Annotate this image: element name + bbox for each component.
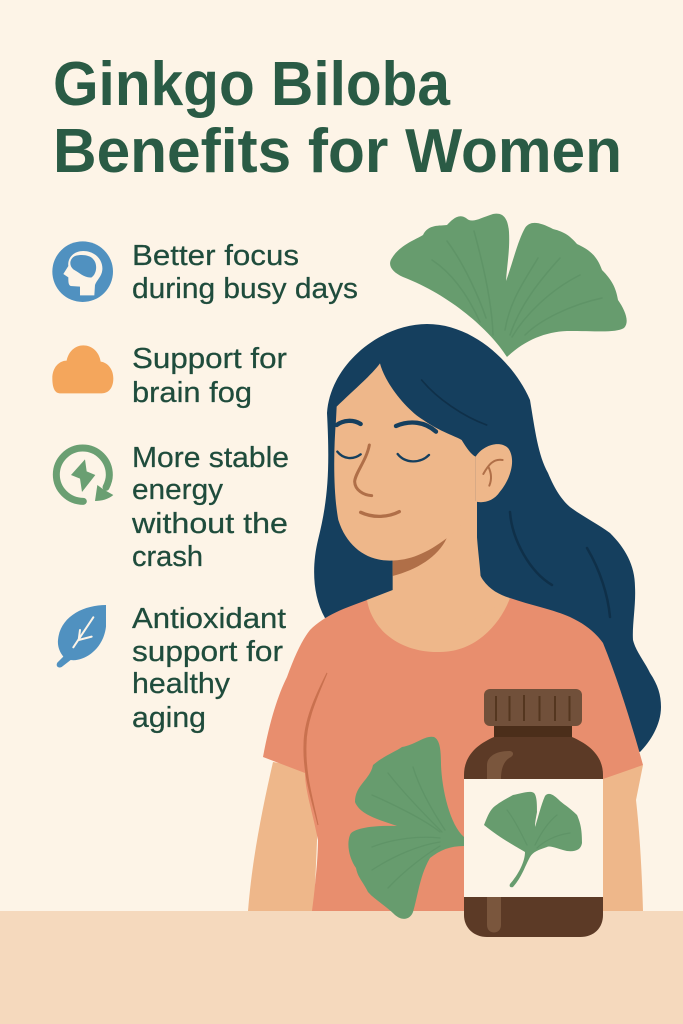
- text: antioxidant: aging: [132, 702, 206, 734]
- chin shadow: [393, 538, 447, 576]
- text: stable energy: [131, 442, 289, 573]
- icon: head with brain: [52, 241, 113, 302]
- highlight: [487, 751, 513, 932]
- supplement bottle: [464, 689, 603, 937]
- ginkgo leaf above head: [390, 214, 627, 357]
- text: antioxidant: healthy: [132, 668, 231, 700]
- text: antioxidant: Antioxidant: [132, 603, 286, 635]
- table: [0, 911, 683, 1024]
- text: brain fog: [132, 343, 287, 409]
- text: brain fog: Support for: [132, 343, 287, 375]
- shirt fold: [304, 673, 327, 825]
- text: better focus: Better focus: [132, 240, 299, 272]
- nose: [355, 445, 372, 496]
- text: stable energy: crash: [132, 541, 203, 573]
- hair strand: [422, 380, 487, 425]
- closed eyes: [337, 452, 429, 461]
- right arm: [600, 765, 643, 911]
- title: [53, 50, 622, 186]
- title: Benefits for Women: [53, 117, 622, 186]
- cap: [484, 689, 582, 726]
- title: Ginkgo Biloba: [53, 50, 450, 119]
- text: antioxidant: [132, 603, 286, 734]
- shirt: [263, 598, 643, 911]
- text: better focus: during busy days: [132, 273, 358, 305]
- mouth: [361, 512, 399, 516]
- text: stable energy: energy: [132, 474, 224, 506]
- text: brain fog: brain fog: [132, 377, 252, 409]
- bottle body: [464, 737, 603, 937]
- text: antioxidant: support for: [132, 636, 283, 668]
- text: better focus: [132, 240, 358, 305]
- label: [464, 779, 603, 897]
- face: [334, 363, 512, 576]
- ginkgo leaf beside bottle: [348, 737, 464, 919]
- icon: blue leaf: [57, 605, 106, 667]
- left arm: [248, 762, 320, 911]
- face shape: [334, 363, 476, 561]
- neck: [367, 500, 517, 653]
- cap ridges: [496, 695, 570, 721]
- label leaf: [484, 792, 582, 887]
- ear: [476, 444, 512, 502]
- eyebrows: [337, 421, 436, 432]
- woman illustration: [248, 324, 661, 911]
- hair strands on back: [510, 512, 610, 617]
- bottle neck: [494, 724, 572, 740]
- text: stable energy: without the: [131, 508, 288, 540]
- benefit list: [52, 240, 358, 734]
- icon: cloud: [52, 345, 113, 393]
- long hair: [314, 324, 661, 752]
- ear detail: [483, 460, 503, 486]
- text: stable energy: More stable: [132, 442, 289, 474]
- icon: energy cycle: [56, 448, 113, 501]
